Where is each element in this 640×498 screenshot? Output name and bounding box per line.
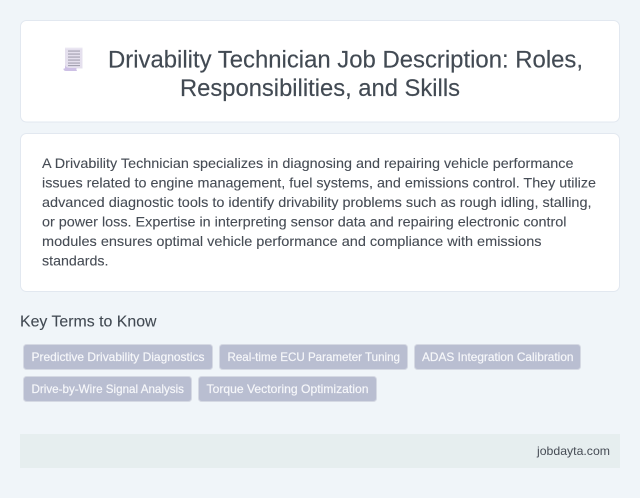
- title: Drivability Technician Job Description: Roles,: [108, 46, 583, 74]
- tag: predictive diagnostics: [24, 344, 212, 370]
- text block: description: standards.: [42, 252, 108, 268]
- tag: predictive diagnostics: Predictive Drivability Diagnostics: [32, 350, 204, 364]
- text block: description: modules ensures optimal vehicle performance and compliance with emissions: [42, 233, 542, 249]
- tag: ECU tuning: [220, 344, 408, 370]
- tag: torque vectoring: Torque Vectoring Optimization: [206, 382, 368, 396]
- tag: drive-by-wire: Drive-by-Wire Signal Analysis: [32, 382, 184, 396]
- text block: description: advanced diagnostic tools to identify drivability problems such as rough idling, stalling,: [42, 194, 592, 210]
- text block: description: or power loss. Expertise in interpreting sensor data and repairing electronic control: [42, 214, 566, 230]
- text block: description: [42, 155, 596, 268]
- text block: description: A Drivability Technician specializes in diagnosing and repairing vehicle performance: [42, 155, 574, 171]
- text block: description: issues related to engine management, fuel systems, and emissions control. They utilize: [42, 174, 596, 190]
- title: Responsibilities, and Skills: [180, 75, 460, 102]
- tag: ECU tuning: Real-time ECU Parameter Tuning: [228, 350, 400, 364]
- heading: key terms: Key Terms to Know: [20, 314, 157, 330]
- tag: torque vectoring: [198, 376, 376, 402]
- tag: ADAS calibration: [414, 344, 580, 370]
- tag: ADAS calibration: ADAS Integration Calibration: [422, 350, 574, 364]
- panel: description: [20, 134, 620, 292]
- footer: jobdayta.com: [536, 444, 610, 458]
- icon: document scroll: [64, 48, 82, 71]
- panel: title card: [20, 20, 620, 122]
- tag: drive-by-wire: [24, 376, 192, 402]
- title: [108, 46, 583, 102]
- tags: key terms: [24, 344, 580, 402]
- footer: [20, 434, 620, 468]
